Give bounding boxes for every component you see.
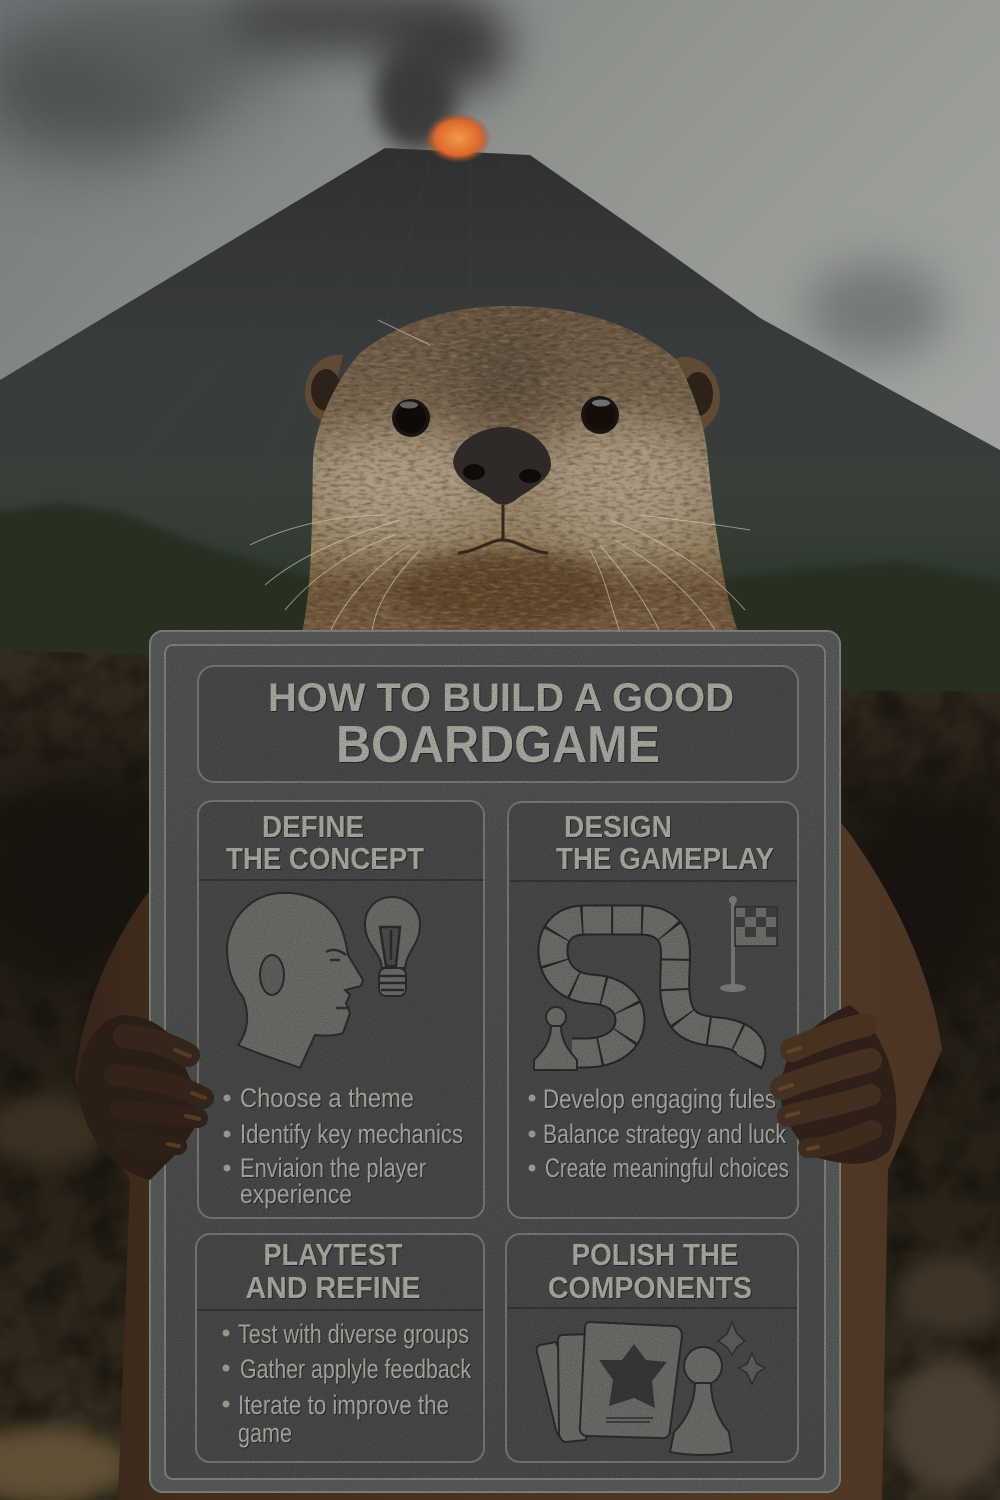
metal sign [150,631,840,1492]
otter head and neck [290,300,750,640]
icon: light bulb [365,897,420,996]
crater glow [425,113,491,163]
heading: DEFINE [262,809,364,844]
icon: sparkles [718,1322,765,1384]
panel: design the gameplay [508,802,798,1218]
whiskers [250,320,750,632]
bullet list: Test with diverse groups [238,1319,469,1349]
panel: polish the components: COMPONENTS [548,1270,752,1305]
bullet list: Balance strategy and luck [543,1119,786,1149]
panel: playtest and refine: AND REFINE [246,1270,420,1305]
volcano [0,113,1000,600]
otter mouth [458,505,548,553]
sign texture [150,631,840,1492]
otter eyes [392,396,619,437]
background: sky [0,0,1000,620]
rocky ground [0,650,1000,1500]
otter nose [453,427,551,505]
icon: head profile [227,893,363,1068]
bullet list [222,1319,471,1448]
bullet list: Develop engaging fules [543,1084,776,1114]
bullet list: experience [240,1179,352,1209]
panel: define the concept [198,801,484,1218]
left paw [78,1015,205,1180]
bullet list: Iterate to improve the [238,1390,449,1420]
bullet list: Identify key mechanics [240,1119,463,1149]
panel: design the gameplay: THE GAMEPLAY [556,841,774,876]
bullet list: Choose a theme [240,1083,414,1113]
bullet list: Gather applyle feedback [240,1354,471,1384]
otter ears [305,355,720,434]
right paw [778,1005,897,1164]
sign plate [150,631,840,1492]
heading: PLAYTEST [264,1237,403,1272]
title panel [198,666,798,782]
smoke plume [0,0,945,358]
otter body [75,815,942,1500]
panel: polish the components [506,1234,798,1462]
title text: HOW TO BUILD A GOOD [268,676,734,720]
panel: define the concept: THE CONCEPT [226,841,424,876]
icon: finish flag [720,896,777,992]
panel: playtest and refine [196,1234,484,1462]
heading: DESIGN [564,809,672,844]
icon: board path [553,920,751,1062]
bullet list: Create meaningful choices [545,1153,789,1183]
icon: pawn [670,1347,732,1455]
bullet list: game [238,1418,292,1448]
icon: cards [537,1322,682,1442]
bullet list [224,1083,463,1209]
title panel: BOARDGAME [336,716,660,774]
otter [75,300,942,1500]
tree line [0,503,1000,700]
icon: pawn [534,1007,577,1070]
bullet list: Enviaion the player [240,1153,426,1183]
bullet list [528,1084,789,1183]
heading: POLISH THE [572,1237,738,1272]
